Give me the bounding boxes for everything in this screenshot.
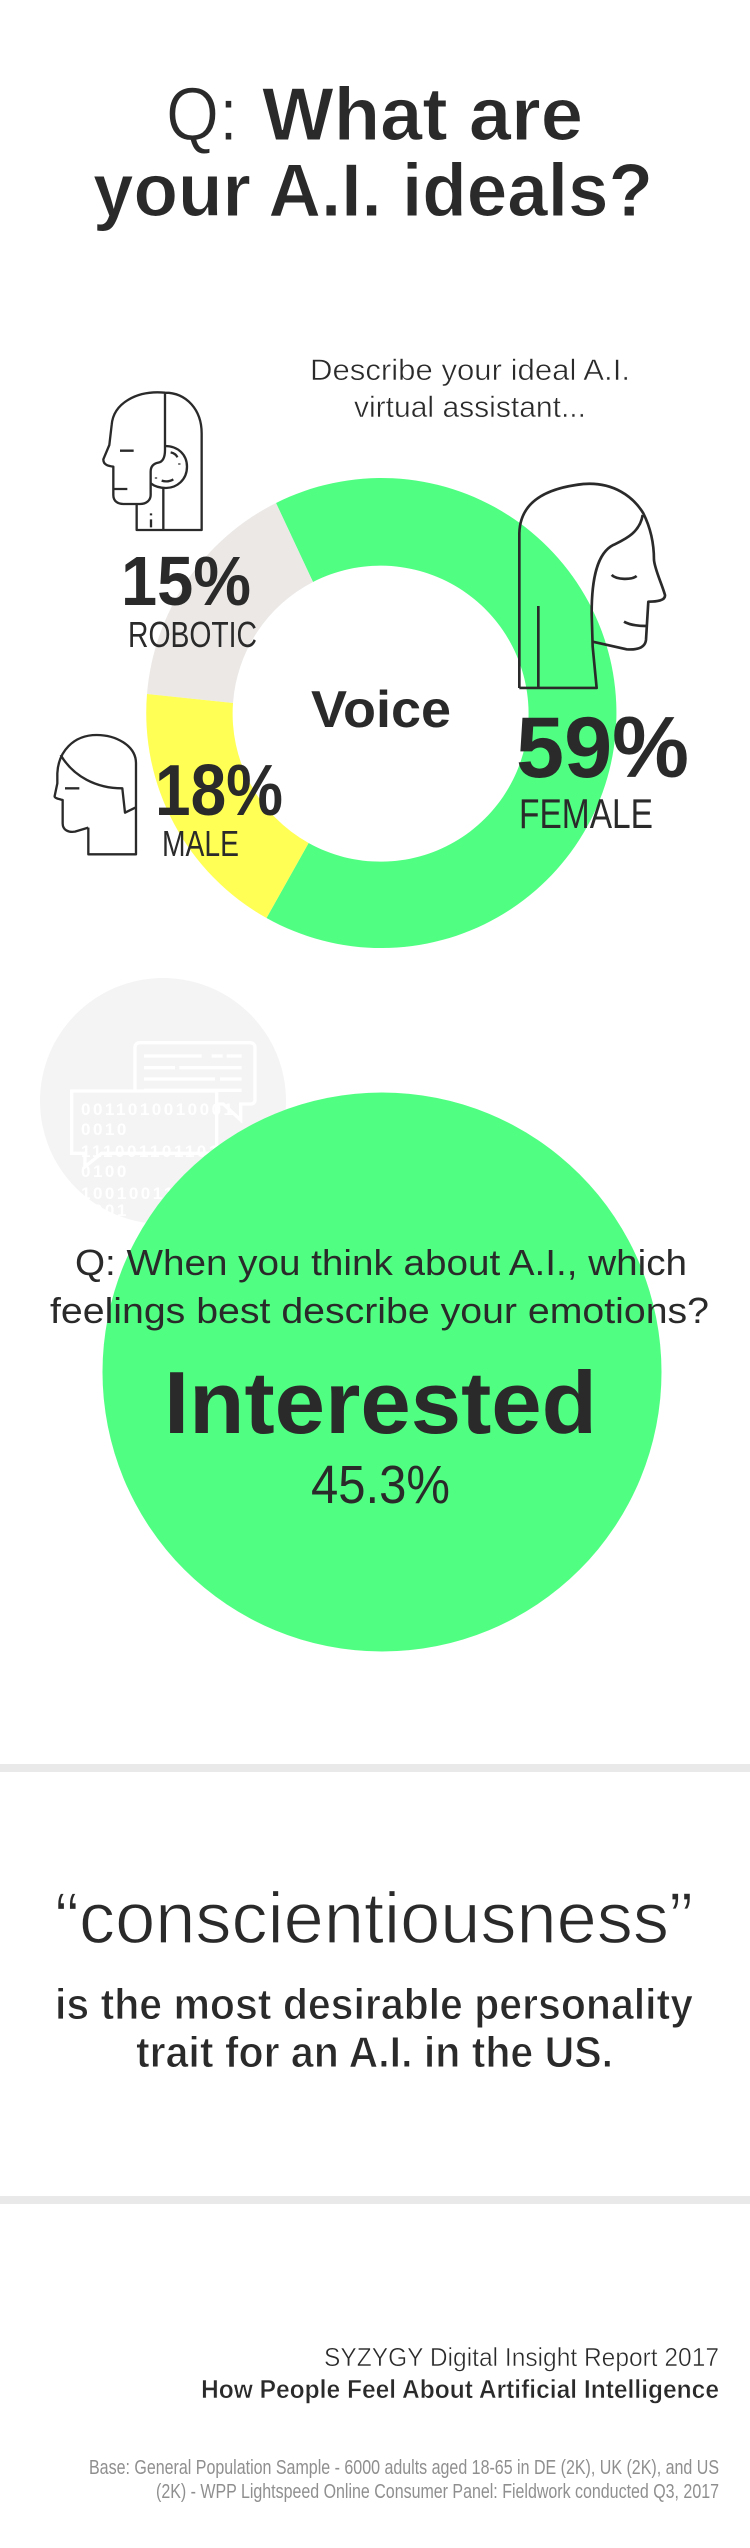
quote caption: [55, 1980, 693, 2077]
icon: female head: [519, 484, 665, 688]
icon: robotic head: [103, 392, 202, 530]
icon: chat bubbles with binary on grey circle: 10010011100: [81, 1184, 211, 1203]
panel: voice preference donut: [55, 354, 689, 948]
icon: chat bubbles with binary on grey circle: 0010: [81, 1120, 129, 1139]
footer: base note: [89, 2457, 719, 2503]
title: your A.I. ideals?: [93, 148, 653, 232]
large green circle: [102, 1092, 662, 1652]
robotic percentage: ROBOTIC: [128, 614, 257, 655]
top emotion percentage: 45.3%: [311, 1455, 450, 1515]
male percentage: 18%: [155, 751, 283, 831]
male percentage: MALE: [162, 823, 239, 864]
question text: [50, 1242, 709, 1331]
title: What are: [262, 72, 583, 156]
question text: Q: When you think about A.I., which: [75, 1242, 687, 1283]
icon: male head: [55, 735, 136, 854]
question text: virtual assistant...: [354, 391, 586, 424]
panel: personality quote: [55, 1879, 693, 2077]
quote caption: is the most desirable personality: [55, 1980, 693, 2029]
icon: chat bubbles with binary on grey circle: 0001: [81, 1201, 129, 1220]
top emotion: Interested: [164, 1353, 597, 1452]
title: [93, 72, 653, 232]
footer: report credit: SYZYGY Digital Insight Report 2017: [324, 2342, 719, 2372]
robotic percentage: 15%: [121, 542, 251, 620]
title: Q:: [166, 72, 238, 156]
icon: chat bubbles with binary on grey circle: 1110011011011: [81, 1142, 232, 1161]
footer: report credit: How People Feel About Artificial Intelligence: [201, 2374, 719, 2404]
icon: chat bubbles with binary on grey circle: 0011010010001: [81, 1100, 235, 1119]
icon: chat bubbles with binary on grey circle: 0100: [81, 1162, 129, 1181]
robotic percentage: [121, 542, 257, 655]
female percentage: [516, 700, 689, 837]
quote word: “conscientiousness”: [55, 1879, 693, 1959]
question text: Describe your ideal A.I.: [310, 354, 630, 387]
question text: feelings best describe your emotions?: [50, 1290, 709, 1331]
footer: report credit: [201, 2342, 719, 2404]
icon: chat bubbles with binary on grey circle: [40, 978, 286, 1224]
male percentage: [155, 751, 283, 864]
female percentage: 59%: [516, 700, 689, 796]
donut centre label: Voice: [311, 681, 451, 739]
female percentage: FEMALE: [519, 790, 653, 837]
donut chart: [146, 478, 616, 948]
panel: emotions: [40, 978, 709, 1652]
question text: [310, 354, 630, 424]
quote caption: trait for an A.I. in the US.: [136, 2028, 613, 2077]
